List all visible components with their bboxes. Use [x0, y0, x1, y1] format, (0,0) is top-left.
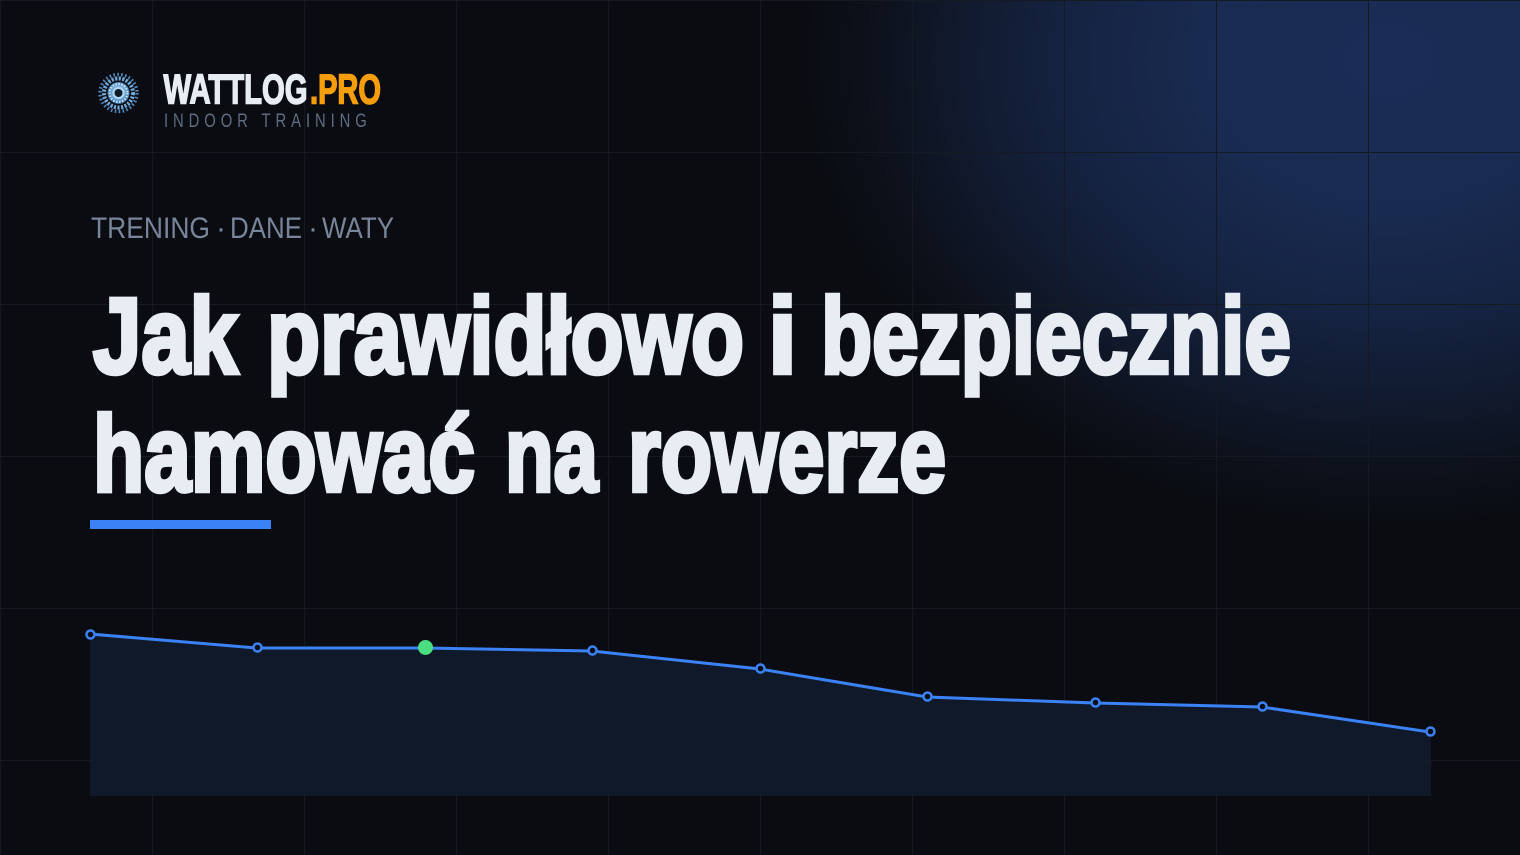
eyebrow: WATY [322, 212, 394, 245]
title: na [505, 393, 599, 514]
line chart [86, 630, 1434, 796]
highlighted data point [418, 640, 433, 655]
title: rowerze [628, 393, 946, 514]
title: bezpiecznie [821, 275, 1291, 396]
eyebrow [91, 212, 394, 245]
title [93, 275, 1291, 514]
title: i [768, 275, 797, 396]
logo wordmark: WATTLOG [164, 66, 308, 112]
title: hamować [93, 393, 475, 514]
title: Jak [93, 275, 239, 396]
chart line [90, 634, 1430, 732]
eyebrow: TRENING [91, 212, 210, 245]
logo tagline: INDOOR TRAINING [164, 110, 367, 131]
logo wordmark: .PRO [310, 66, 381, 112]
eyebrow: · [308, 212, 318, 245]
icon: cassette sprocket logo [100, 74, 137, 112]
eyebrow: DANE [230, 212, 302, 245]
eyebrow: · [216, 212, 226, 245]
chart data points [86, 630, 1434, 736]
title: prawidłowo [267, 275, 744, 396]
chart area fill [90, 634, 1431, 796]
title accent underline [90, 520, 271, 529]
